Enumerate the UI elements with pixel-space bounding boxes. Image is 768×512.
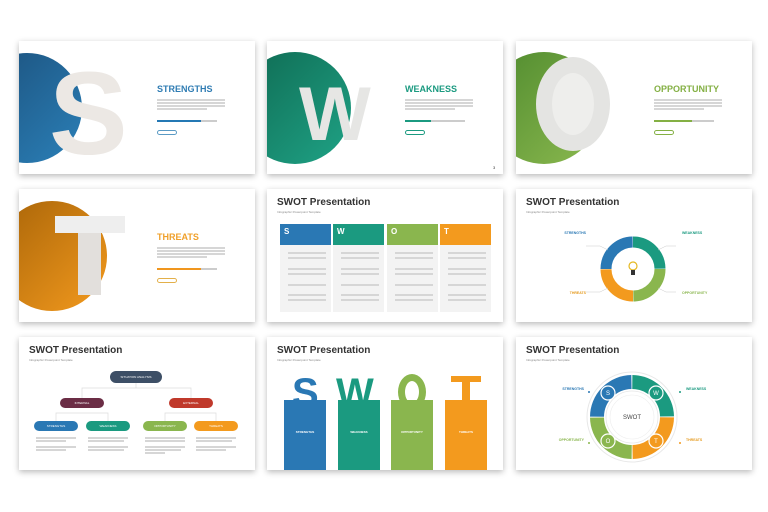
subtitle: Infographic Powerpoint Template [526, 210, 570, 214]
subtitle: Infographic Powerpoint Template [277, 358, 321, 362]
bullet text [36, 437, 236, 454]
column T [440, 224, 491, 312]
label threats: THREATS [570, 291, 586, 295]
title: SWOT Presentation [277, 197, 370, 208]
pill external: EXTERNAL [183, 401, 199, 405]
tag S [284, 371, 326, 470]
donut chart: O [606, 439, 611, 445]
slide: SWOT letter tags [267, 337, 503, 470]
cycle ring [586, 236, 676, 302]
connectors [56, 383, 216, 421]
progress [157, 120, 217, 122]
column T: T [444, 227, 449, 236]
subtitle: Infographic Powerpoint Template [29, 358, 73, 362]
progress [157, 268, 217, 270]
column W: W [337, 227, 345, 236]
label strengths: STRENGTHS [564, 231, 586, 235]
label weakness: WEAKNESS [686, 387, 706, 391]
pill situation analysis [110, 371, 162, 383]
column W [333, 224, 384, 312]
pill threats [194, 421, 238, 431]
progress [405, 120, 465, 122]
pill external [169, 398, 213, 408]
button [405, 130, 425, 135]
title: SWOT Presentation [277, 345, 370, 356]
pill opportunity: OPPORTUNITY [154, 424, 176, 428]
pill weakness: WEAKNESS [99, 424, 116, 428]
slide: weakness [267, 41, 503, 174]
slide: situation analysis tree [19, 337, 255, 470]
slide: cycle diagram [516, 189, 752, 322]
pill threats: THREATS [209, 424, 223, 428]
tag S: S [292, 371, 319, 415]
donut chart [586, 372, 681, 462]
pill internal: INTERNAL [75, 401, 89, 405]
heading: WEAKNESS [405, 84, 457, 94]
column O: O [391, 227, 397, 236]
title: SWOT Presentation [29, 345, 122, 356]
label strengths: STRENGTHS [562, 387, 584, 391]
tag T [445, 376, 487, 470]
pill opportunity [143, 421, 187, 431]
column S: S [284, 227, 289, 236]
label weakness: WEAKNESS [682, 231, 702, 235]
title: SWOT Presentation [526, 197, 619, 208]
tag W [336, 371, 380, 470]
tag T: THREATS [459, 430, 473, 434]
donut chart: S [606, 391, 610, 397]
donut chart: W [653, 391, 659, 397]
circle blue [0, 53, 82, 163]
tag W: WEAKNESS [350, 430, 368, 434]
slide: SWOT table [267, 189, 503, 322]
column O [387, 224, 438, 312]
circle olive [488, 52, 600, 164]
label opportunity: OPPORTUNITY [559, 438, 584, 442]
tag O: OPPORTUNITY [401, 430, 423, 434]
heading: THREATS [157, 232, 199, 242]
button [157, 130, 177, 135]
letter O photo [536, 57, 610, 151]
column S [280, 224, 331, 312]
letter W: W [299, 72, 367, 157]
tag O [391, 374, 433, 470]
circle orange [0, 201, 107, 311]
button [157, 278, 177, 283]
slide: threats [19, 189, 255, 322]
slide: SWOT donut [516, 337, 752, 470]
heading: STRENGTHS [157, 84, 213, 94]
slide: strengths [19, 41, 255, 174]
subtitle: Infographic Powerpoint Template [277, 210, 321, 214]
donut chart: SWOT [623, 415, 641, 421]
tag W: W [336, 371, 374, 415]
label threats: THREATS [686, 438, 702, 442]
donut chart: T [654, 439, 658, 445]
text [654, 99, 722, 110]
letter T [55, 216, 125, 233]
title: SWOT Presentation [526, 345, 619, 356]
subtitle: Infographic Powerpoint Template [526, 358, 570, 362]
progress [654, 120, 714, 122]
pill weakness [86, 421, 130, 431]
slide: opportunity [516, 41, 752, 174]
text [157, 99, 225, 110]
pill internal [60, 398, 104, 408]
pill strengths [34, 421, 78, 431]
tag S: STRENGTHS [296, 430, 314, 434]
circle green [239, 52, 351, 164]
pill strengths: STRENGTHS [47, 424, 65, 428]
text [157, 247, 225, 258]
pill situation analysis: SITUATION ANALYSIS [121, 375, 151, 379]
heading: OPPORTUNITY [654, 84, 719, 94]
page number: 3 [493, 165, 495, 170]
button [654, 130, 674, 135]
label opportunity: OPPORTUNITY [682, 291, 707, 295]
text [405, 99, 473, 110]
